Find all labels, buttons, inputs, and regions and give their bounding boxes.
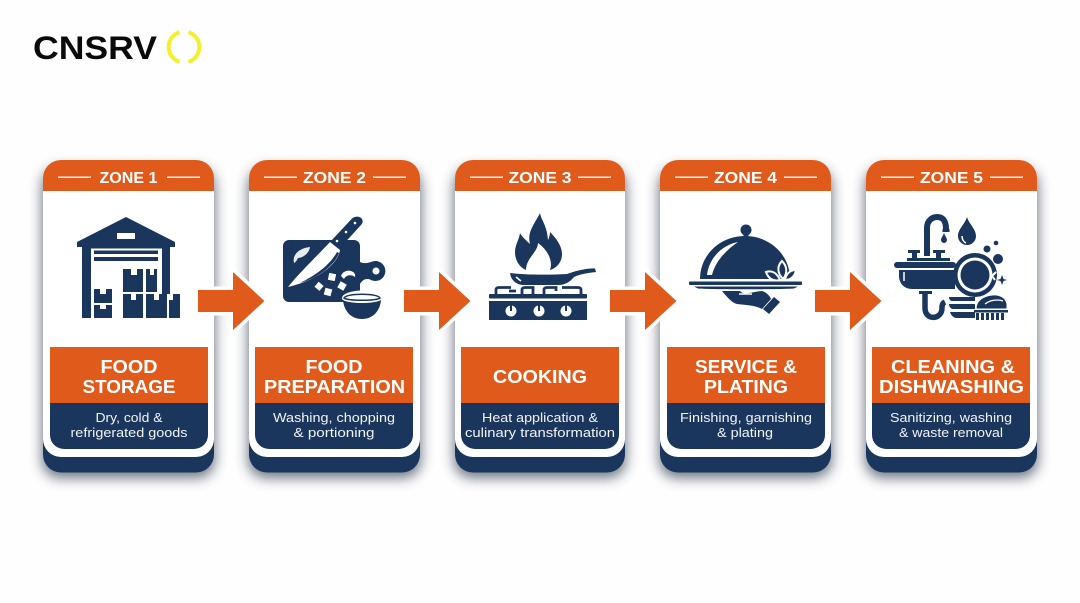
title: cleaning and dishwashing: DISHWASHING <box>879 376 1024 397</box>
arrow: zone 1 to 2 <box>198 272 264 330</box>
heading: zone 5: ZONE 5 <box>920 170 983 187</box>
heading: zone 2: ZONE 2 <box>303 170 366 187</box>
icon: cutting board, knife and bowl <box>283 217 385 319</box>
title: cooking <box>461 347 619 403</box>
description: food preparation: Washing, chopping <box>273 410 395 425</box>
arrow: zone 4 to 5 <box>815 272 882 330</box>
panel: zone 3 cooking <box>454 160 626 478</box>
icon: sink, dishes and brush <box>894 217 1008 320</box>
description: food storage <box>50 403 208 449</box>
heading: zone 3: ZONE 3 <box>508 170 572 187</box>
description: food preparation: & portioning <box>294 425 374 440</box>
title: food preparation: PREPARATION <box>264 376 405 397</box>
panel: zone 5 cleaning and dishwashing <box>865 160 1038 478</box>
description: cooking: Heat application & <box>482 410 598 425</box>
title: service and plating: SERVICE & <box>695 356 797 377</box>
panel: zone 4 service and plating <box>659 160 832 478</box>
icon: warehouse with boxes <box>77 217 180 318</box>
description: cleaning and dishwashing: & waste removal <box>899 425 1003 440</box>
icon: serving cloche and hand <box>689 224 802 314</box>
title: cooking: COOKING <box>493 366 587 387</box>
description: food storage: Dry, cold & <box>96 410 163 425</box>
title: food preparation <box>255 347 413 403</box>
panel: zone 2 food preparation <box>248 160 421 478</box>
title: service and plating: PLATING <box>704 376 788 397</box>
title: service and plating <box>667 347 825 403</box>
description: cleaning and dishwashing: Sanitizing, washing <box>890 410 1012 425</box>
description: service and plating: & plating <box>717 425 773 440</box>
description: service and plating <box>667 403 825 449</box>
title: food storage <box>50 347 208 403</box>
description: food preparation <box>255 403 413 449</box>
title: cleaning and dishwashing <box>872 347 1030 403</box>
description: cooking: culinary transformation <box>465 425 615 440</box>
heading: zone 4: ZONE 4 <box>714 170 777 187</box>
heading: zone 1: ZONE 1 <box>100 170 158 187</box>
title: food storage: FOOD <box>100 356 158 377</box>
title: food storage: STORAGE <box>82 376 176 397</box>
arrow: zone 2 to 3 <box>404 272 470 330</box>
description: service and plating: Finishing, garnishing <box>680 410 812 425</box>
arrow: zone 3 to 4 <box>610 272 676 330</box>
panel: zone 1 food storage <box>42 160 215 478</box>
description: cooking <box>461 403 619 449</box>
logo: CNSRV: CNSRV <box>33 30 158 66</box>
description: food storage: refrigerated goods <box>70 425 188 440</box>
description: cleaning and dishwashing <box>872 403 1030 449</box>
title: cleaning and dishwashing: CLEANING & <box>891 356 1015 377</box>
logo: CNSRV <box>33 30 199 66</box>
title: food preparation: FOOD <box>306 356 362 377</box>
icon: flame, pan and stove <box>489 213 596 320</box>
